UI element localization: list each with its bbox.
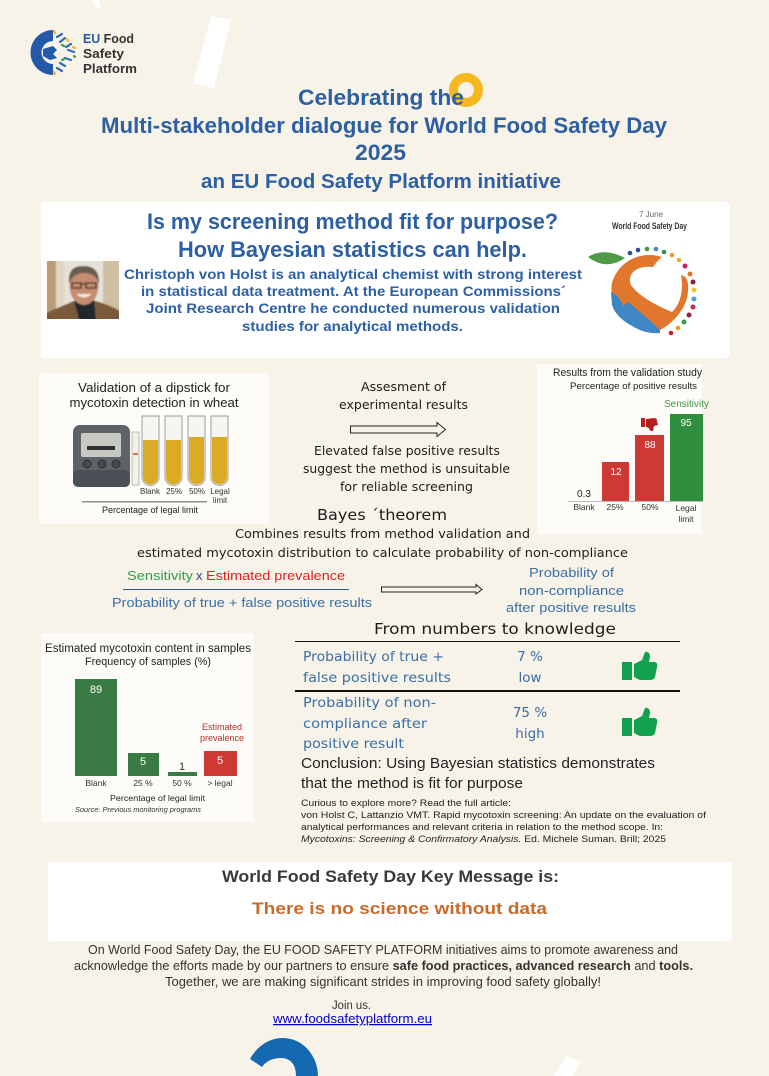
title: an EU Food Safety Platform initiative bbox=[201, 171, 561, 193]
tube labels: limit bbox=[213, 496, 228, 505]
Bayes theorem explanation: Bayes ´theorem bbox=[317, 506, 447, 524]
World Food Safety Day emblem: World Food Safety Day bbox=[612, 221, 687, 231]
formula: Estimated prevalence bbox=[206, 568, 345, 583]
panel: estimated mycotoxin bar chart: 5 bbox=[217, 755, 223, 767]
panel: estimated mycotoxin bar chart: Percentage of legal limit bbox=[110, 793, 206, 803]
closing statement: acknowledge the efforts made by our partners to ensure safe food practices, advanced research and tools. bbox=[74, 959, 693, 973]
call to action and website: Join us. bbox=[332, 1000, 371, 1012]
panel: validation study bar chart: 95 bbox=[680, 418, 692, 429]
logo: EU Food Safety Platform: Platform bbox=[83, 61, 137, 76]
formula: Sensitivity bbox=[127, 568, 194, 583]
icon: thumbs up bbox=[622, 708, 657, 736]
reference text: Mycotoxins: Screening & Confirmatory Analysis. Ed. Michele Suman. Brill; 2025 bbox=[301, 834, 666, 844]
panel: key message bbox=[48, 862, 732, 941]
closing statement: Together, we are making significant strides in improving food safety globally! bbox=[165, 975, 601, 989]
World Food Safety Day emblem: 7 June bbox=[639, 210, 664, 219]
tube labels: Blank bbox=[140, 487, 161, 496]
assessment of experimental results: Elevated false positive results bbox=[314, 443, 500, 458]
panel: validation study bar chart: Blank bbox=[573, 502, 595, 512]
speaker biography bbox=[124, 266, 582, 334]
reference text: Curious to explore more? Read the full article: bbox=[301, 798, 511, 808]
panel: validation study bar chart: 25% bbox=[606, 502, 624, 512]
panel: validation study bar chart: Percentage of positive results bbox=[570, 381, 697, 392]
icon: wheat test tubes bbox=[142, 416, 228, 486]
Bayes theorem explanation: Combines results from method validation and bbox=[235, 526, 530, 541]
heading: talk title bbox=[147, 209, 558, 262]
result of formula: non-compliance bbox=[519, 583, 624, 598]
Bayes theorem explanation: estimated mycotoxin distribution to calculate probability of non-compliance bbox=[137, 545, 628, 560]
title: Multi-stakeholder dialogue for World Food Safety Day bbox=[101, 113, 668, 138]
result of formula: Probability of bbox=[529, 565, 614, 580]
conclusion: Conclusion: Using Bayesian statistics demonstrates bbox=[301, 755, 655, 772]
formula bbox=[112, 568, 373, 610]
title: Celebrating the bbox=[298, 85, 464, 110]
tube labels: 25% bbox=[166, 487, 182, 496]
panel: estimated mycotoxin bar chart: Estimated mycotoxin content in samples bbox=[45, 643, 251, 655]
speaker biography: Christoph von Holst is an analytical chemist with strong interest bbox=[124, 266, 582, 282]
row: non-compliance: Probability of non- bbox=[303, 695, 436, 711]
panel: estimated mycotoxin bar chart bbox=[41, 633, 254, 822]
assessment of experimental results: Assesment of bbox=[361, 379, 447, 394]
conclusion bbox=[301, 755, 655, 792]
tube labels bbox=[140, 487, 230, 505]
panel: estimated mycotoxin bar chart: Source: Previous monitoring programs bbox=[75, 805, 201, 814]
panel: dipstick validation illustration: Percentage of legal limit bbox=[102, 505, 198, 515]
panel: key message: World Food Safety Day Key Message is: bbox=[222, 867, 559, 886]
panel: validation study bar chart: Legal bbox=[676, 503, 697, 513]
arrow bbox=[350, 422, 446, 436]
tube labels: 50% bbox=[189, 487, 205, 496]
panel: validation study bar chart bbox=[537, 364, 709, 534]
formula: x bbox=[196, 568, 203, 583]
decorative blue arc bbox=[250, 1038, 318, 1076]
Bayes theorem explanation bbox=[137, 506, 628, 560]
panel: from numbers to knowledge: From numbers to knowledge bbox=[374, 620, 616, 638]
icon: dipstick reader bbox=[73, 425, 139, 487]
row: non-compliance: high bbox=[515, 726, 545, 742]
row: true and false positives: 7 % bbox=[517, 649, 543, 665]
panel: estimated mycotoxin bar chart: > legal bbox=[207, 778, 233, 788]
call to action and website bbox=[272, 1000, 432, 1026]
panel: dipstick validation illustration: Validation of a dipstick for bbox=[78, 380, 231, 395]
arrow bbox=[382, 584, 482, 594]
row: non-compliance: compliance after bbox=[303, 716, 427, 732]
logo: EU Food Safety Platform: Safety bbox=[83, 46, 125, 61]
speaker biography: Joint Research Centre he conducted numerous validation bbox=[146, 300, 560, 316]
row: true and false positives: low bbox=[518, 670, 542, 686]
panel: estimated mycotoxin bar chart: Estimated bbox=[202, 722, 242, 732]
row: non-compliance: positive result bbox=[303, 736, 404, 752]
row: true and false positives: false positive results bbox=[303, 670, 451, 686]
logo: EU Food Safety Platform bbox=[30, 30, 137, 76]
speaker biography: studies for analytical methods. bbox=[242, 318, 463, 334]
panel: key message: There is no science without data bbox=[252, 899, 548, 918]
panel: speaker introduction bbox=[41, 202, 730, 358]
heading: talk title: Is my screening method fit for purpose? bbox=[147, 209, 558, 234]
panel: estimated mycotoxin bar chart: prevalence bbox=[200, 733, 244, 743]
conclusion: that the method is fit for purpose bbox=[301, 775, 523, 792]
World Food Safety Day emblem bbox=[588, 210, 696, 335]
assessment of experimental results: experimental results bbox=[339, 397, 468, 412]
closing statement: On World Food Safety Day, the EU FOOD SAFETY PLATFORM initiatives aims to promote awareness and bbox=[88, 943, 678, 957]
panel: estimated mycotoxin bar chart: Frequency of samples (%) bbox=[85, 656, 211, 668]
logo: EU Food Safety Platform: EU Food bbox=[83, 31, 134, 46]
panel: validation study bar chart: limit bbox=[678, 514, 694, 524]
speaker photo bbox=[44, 258, 122, 322]
panel: validation study bar chart: 12 bbox=[610, 467, 622, 478]
formula: Probability of true + false positive results bbox=[112, 595, 373, 610]
speaker biography: in statistical data treatment. At the European Commissions´ bbox=[141, 283, 566, 299]
tube labels: Legal bbox=[210, 487, 230, 496]
row: true and false positives bbox=[303, 649, 657, 686]
panel: estimated mycotoxin bar chart: 5 bbox=[140, 756, 146, 768]
reference text bbox=[301, 798, 707, 844]
reference text: analytical performances and relevant criteria in relation to the method scope. In: bbox=[301, 822, 663, 832]
panel: dipstick validation illustration bbox=[39, 373, 269, 524]
row: non-compliance: 75 % bbox=[513, 705, 547, 721]
panel: estimated mycotoxin bar chart: Blank bbox=[85, 778, 107, 788]
panel: validation study bar chart: Results from the validation study bbox=[553, 367, 702, 379]
assessment of experimental results: for reliable screening bbox=[340, 479, 473, 494]
row: true and false positives: Probability of true + bbox=[303, 649, 444, 665]
result of formula bbox=[506, 565, 637, 615]
panel: validation study bar chart: 0.3 bbox=[577, 489, 591, 500]
panel: validation study bar chart: 88 bbox=[644, 440, 656, 451]
panel: dipstick validation illustration: mycotoxin detection in wheat bbox=[70, 395, 239, 410]
icon: thumbs down bbox=[641, 418, 658, 431]
result of formula: after positive results bbox=[506, 600, 637, 615]
assessment of experimental results: suggest the method is unsuitable bbox=[303, 461, 510, 476]
call to action and website: www.foodsafetyplatform.eu bbox=[272, 1012, 432, 1026]
title: 2025 bbox=[355, 140, 406, 165]
panel: validation study bar chart: Sensitivity bbox=[664, 399, 709, 410]
title bbox=[101, 85, 668, 193]
row: non-compliance bbox=[303, 695, 657, 752]
panel: estimated mycotoxin bar chart: 50 % bbox=[172, 778, 192, 788]
panel: estimated mycotoxin bar chart: 1 bbox=[179, 761, 185, 773]
assessment of experimental results bbox=[303, 379, 510, 494]
decorative yellow ring bbox=[454, 78, 478, 102]
heading: talk title: How Bayesian statistics can help. bbox=[178, 237, 527, 262]
panel: from numbers to knowledge bbox=[295, 620, 680, 752]
panel: estimated mycotoxin bar chart: 25 % bbox=[133, 778, 153, 788]
panel: validation study bar chart: 50% bbox=[641, 502, 659, 512]
icon: thumbs up bbox=[622, 652, 657, 680]
panel: estimated mycotoxin bar chart: 89 bbox=[90, 684, 102, 696]
closing statement bbox=[74, 943, 693, 989]
reference text: von Holst C, Lattanzio VMT. Rapid mycotoxin screening: An update on the evaluation of bbox=[301, 810, 707, 820]
